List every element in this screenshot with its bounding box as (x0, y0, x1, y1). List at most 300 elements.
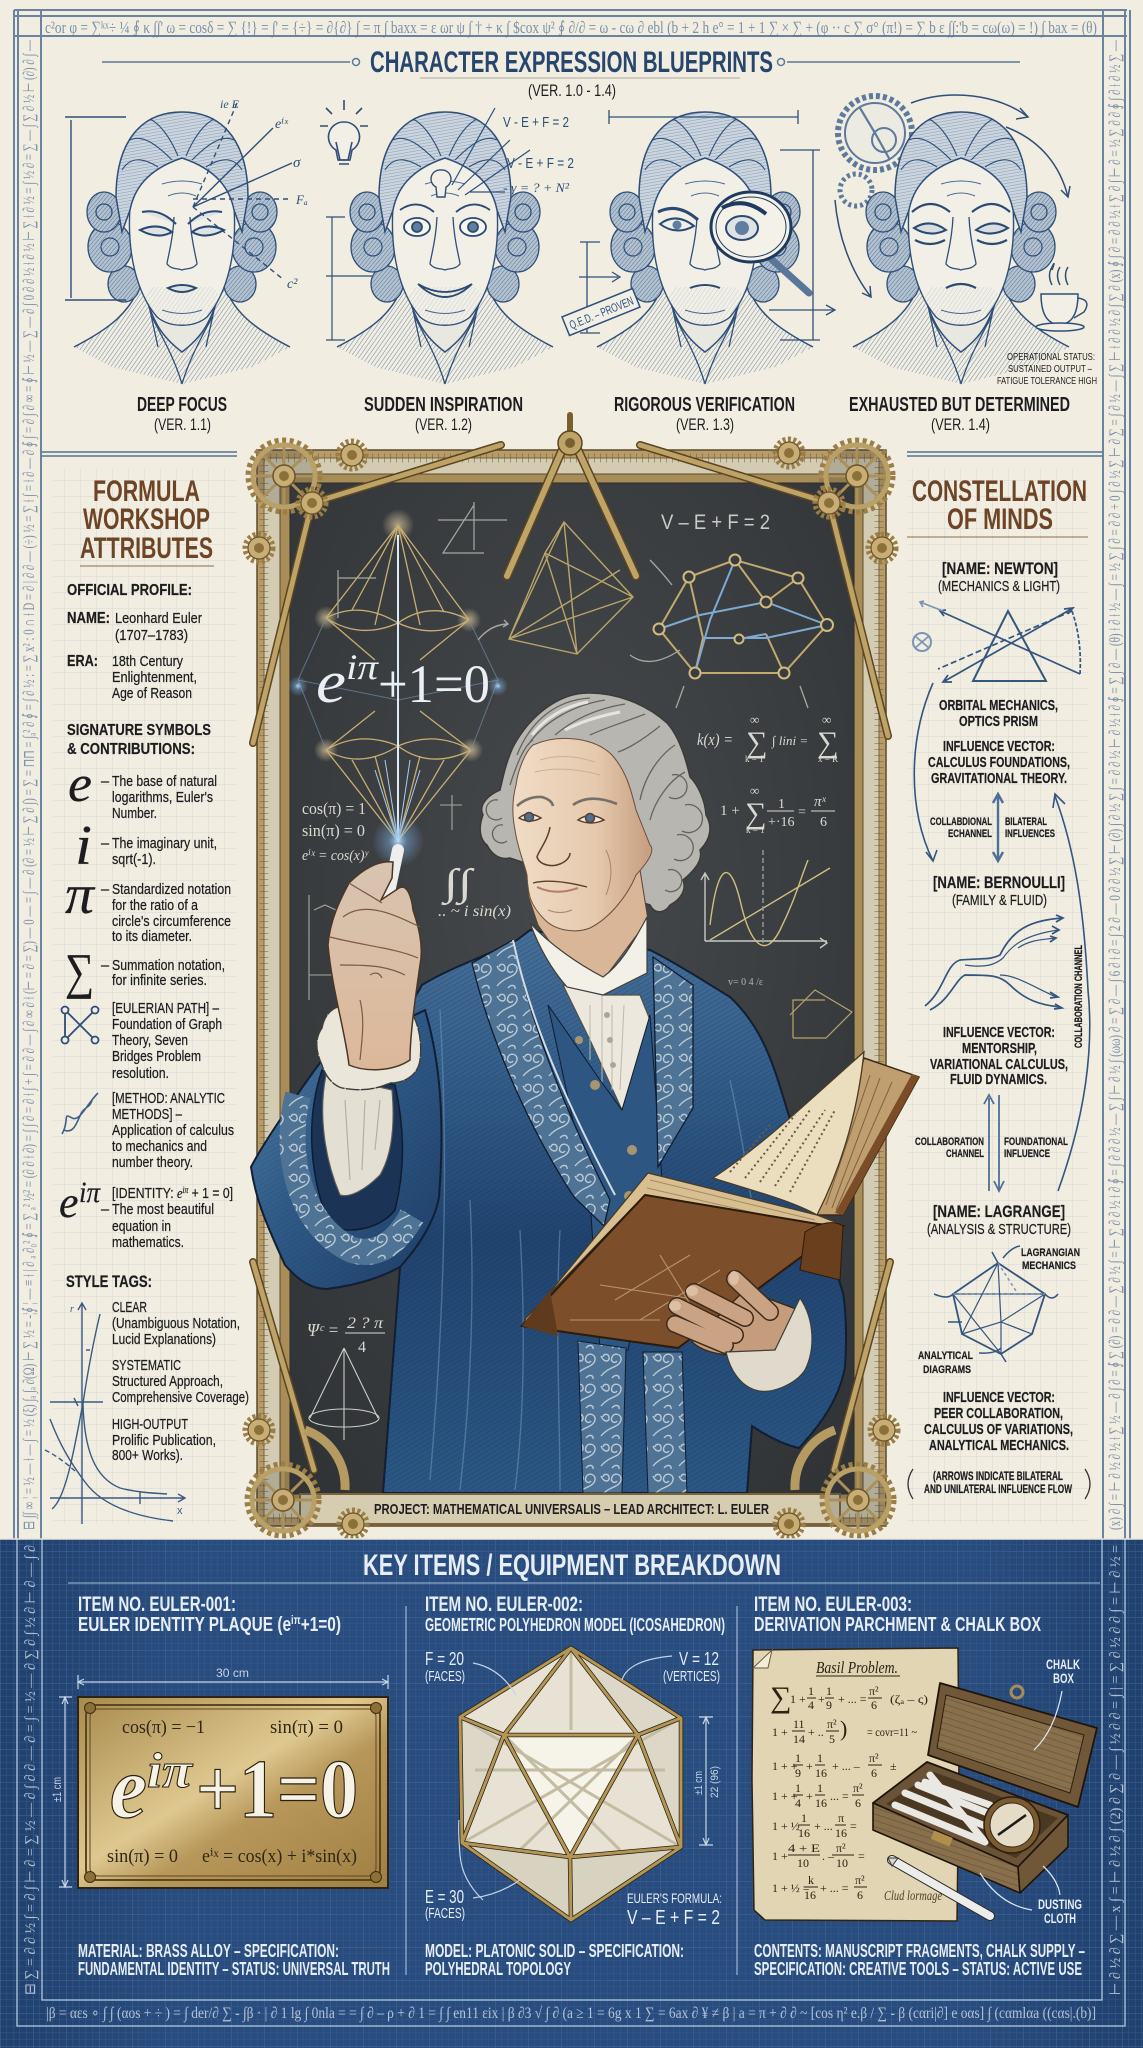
callouts: chalk box and cloth: BOX (1053, 1670, 1074, 1686)
central chalkboard portrait (245, 415, 919, 1538)
handwritten series equations: π² (869, 1684, 879, 1698)
portrait: exhausted but determined (835, 95, 1097, 387)
wig strands and curls (486, 698, 702, 892)
derivation parchment (752, 1648, 959, 1921)
text: analytic methods: METHODS] – (112, 1107, 183, 1123)
project caption plate: PROJECT: MATHEMATICAL UNIVERSALIS – LEAD ARCHITECT: L. EULER (374, 1501, 769, 1518)
raised sleeve (251, 1010, 441, 1289)
handwritten series equations: 1 + ½ (772, 1819, 800, 1833)
handwritten series equations: + ... = (820, 1881, 849, 1895)
handwritten series equations: + ... – (832, 1759, 861, 1773)
arrows: bernoulli lagrange: FOUNDATIONAL (1004, 1136, 1068, 1148)
annotation: dimension lines (579, 110, 835, 340)
lagrange entry: [NAME: LAGRANGE] (933, 1202, 1065, 1221)
handwritten series equations: k (808, 1873, 814, 1887)
item 2: icosahedron model (425, 1593, 725, 1979)
page edges (522, 1173, 843, 1326)
icosahedron (460, 1648, 681, 1920)
handwritten series equations: 1 (808, 1684, 814, 1698)
bernoulli entry: VARIATIONAL CALCULUS, (930, 1057, 1068, 1073)
handwritten series equations: 6 (857, 1888, 863, 1902)
gears: top right (775, 439, 896, 562)
compass instrument (984, 1797, 1040, 1853)
text: eulerian path: [EULERIAN PATH] – (112, 1001, 220, 1017)
handwritten series equations: + ... = (838, 1692, 867, 1706)
handwritten series equations: 1 (795, 1751, 801, 1765)
lagrange entry: PEER COLLABORATION, (934, 1406, 1063, 1422)
item 2: icosahedron model: GEOMETRIC POLYHEDRON MODEL (ICOSAHEDRON) (425, 1615, 725, 1635)
stamp: Q.E.D. proven (562, 288, 640, 336)
chalk: euler identity formula: +1=0 (378, 654, 490, 714)
chalk: summation formulas: ∞ (750, 712, 759, 727)
handwritten series equations: 1 (826, 1684, 832, 1698)
chalk: summation formulas: k = 1 (746, 825, 765, 835)
icon: optics prism (913, 601, 1080, 682)
symbol and text: identity: equation in (112, 1219, 171, 1235)
signature symbols heading (67, 722, 211, 758)
cuff ruffle (317, 1005, 421, 1090)
lagrange entry: DIAGRAMS (923, 1364, 971, 1376)
base (873, 1762, 1068, 1867)
section title: character expression blueprints: (VER. 1.0 - 1.4) (528, 81, 616, 100)
symbol: e: e (68, 756, 92, 813)
newton entry: GRAVITATIONAL THEORY. (931, 771, 1067, 787)
heading: ATTRIBUTES (80, 532, 213, 565)
chart: function curves (45, 1303, 185, 1524)
lagrange entry: CALCULUS OF VARIATIONS, (924, 1422, 1073, 1438)
lid (928, 1683, 1097, 1807)
handwritten series equations: 1 (801, 1811, 807, 1825)
handwritten series equations: 10 (797, 1856, 809, 1870)
lagrange entry (918, 1202, 1080, 1454)
symbol and text: identity: [IDENTITY: e (112, 1186, 185, 1202)
signature symbols heading: & CONTRIBUTIONS: (67, 741, 195, 758)
newton entry (913, 559, 1080, 787)
item 3: parchment and chalk box: ITEM NO. EULER-003: (754, 1593, 912, 1616)
bernoulli entry: FLUID DYNAMICS. (950, 1072, 1047, 1088)
style tags list: Comprehensive Coverage) (112, 1390, 249, 1406)
text: analytic methods: to mechanics and (112, 1139, 207, 1155)
wide eyes and smile (400, 204, 490, 297)
heading: OF MINDS (947, 503, 1053, 536)
arrow: long right collaboration channel (1053, 794, 1090, 1191)
chalk: summation formulas (697, 712, 838, 835)
text: analytic methods (112, 1091, 234, 1171)
item 3: parchment and chalk box (752, 1593, 1097, 1979)
symbol: pi: to its diameter. (112, 929, 192, 945)
portrait: rigorous verification (562, 110, 835, 384)
chalk: summation formulas: k(x) = (697, 730, 733, 749)
icon: fluid flow (925, 915, 1063, 1010)
derivation parchment: Clud lormage (884, 1889, 942, 1904)
note: arrows legend (908, 1469, 1090, 1499)
stamp: Q.E.D. proven: Q.E.D. – PROVEN (567, 294, 636, 332)
chalk: summation formulas: = (798, 805, 806, 820)
text: analytic methods: [METHOD: ANALYTIC (112, 1091, 225, 1107)
brass plaque: sin(π) = 0 (107, 1846, 178, 1867)
brass plaque (78, 1697, 388, 1888)
symbol: e: The base of natural (112, 774, 217, 790)
handwritten series equations: 9 (826, 1698, 832, 1712)
annotations: V – E + F = 2 (627, 1907, 720, 1929)
handwritten series equations: ± (890, 1759, 897, 1773)
handwritten series equations: 16 (835, 1826, 847, 1840)
callout: operational status (997, 352, 1097, 387)
handwritten series equations: 4 (808, 1698, 814, 1712)
official profile: (1707–1783) (115, 628, 188, 644)
chalk: summation formulas: 1 (778, 797, 785, 812)
handwritten series equations: + ... (814, 1819, 833, 1833)
annotations: (FACES) (425, 1905, 465, 1922)
left lapel embroidery (472, 940, 610, 1226)
icon: magnifying glass (711, 192, 809, 293)
annotations: E = 30 (425, 1887, 464, 1907)
handwritten series equations: ) (840, 1716, 847, 1741)
chalk: trigonometric identities (302, 799, 511, 920)
callouts: chalk box and cloth: CLOTH (1044, 1910, 1076, 1926)
chalk: psi formula and cone (307, 1315, 385, 1440)
arrow: bilateral newton bernoulli (930, 794, 1055, 861)
face features (517, 756, 617, 912)
chalk: summation formulas: k = 1 (745, 754, 764, 764)
arrow: bilateral newton bernoulli: COLLABDIONAL (930, 816, 992, 828)
chalk: summation formulas: +·16 (768, 815, 795, 830)
symbol and text: identity: e (59, 1178, 79, 1227)
leather cover (522, 1195, 843, 1348)
handwritten series equations: 1 (817, 1781, 823, 1795)
symbol: i: i (75, 815, 92, 877)
handwritten series equations: 1 (817, 1751, 823, 1765)
heading: WORKSHOP (83, 503, 210, 536)
chalk: bottom right sketches (790, 990, 852, 1038)
handwritten series equations: 1 + ½ = (772, 1881, 810, 1895)
handwritten series equations: + (806, 1759, 813, 1773)
large compass: left (253, 445, 501, 743)
official profile: 18th Century (112, 654, 184, 670)
handwritten series equations: 14 (793, 1732, 805, 1746)
symbol and text: identity: iπ (79, 1176, 101, 1209)
chalk stick pen (892, 1860, 990, 1916)
chalk: graph (701, 850, 830, 948)
annotations: EULER'S FORMULA: (627, 1890, 722, 1906)
annotations: V = 12 (679, 1649, 719, 1669)
symbol: sigma: ∑ (65, 943, 94, 999)
handwritten series equations: 1 + (772, 1725, 788, 1739)
official profile: OFFICIAL PROFILE: (67, 582, 192, 599)
arrows: bernoulli lagrange: COLLABORATION (915, 1136, 984, 1148)
symbol: e: logarithms, Euler's (112, 790, 213, 806)
label: deep focus: (VER. 1.1) (154, 415, 211, 434)
icon: eulerian path graph (62, 1006, 98, 1044)
newton entry: (MECHANICS & LIGHT) (938, 578, 1060, 595)
section title: character expression blueprints: CHARACTER EXPRESSION BLUEPRINTS (370, 46, 773, 79)
handwritten series equations: π² (836, 1841, 846, 1855)
handwritten series equations: 4 (795, 1796, 801, 1810)
brass plaque: cos(π) = −1 (122, 1717, 205, 1738)
coat body (383, 930, 846, 1493)
panel border (17, 1539, 1125, 2026)
handwritten series equations: 6 (871, 1698, 877, 1712)
handwritten series equations: = (850, 1819, 857, 1833)
item 2: icosahedron model: POLYHEDRAL TOPOLOGY (425, 1959, 571, 1979)
callout: operational status: OPERATIONAL STATUS: (1007, 352, 1095, 363)
chalk: trigonometric identities: ∫∫ (441, 862, 475, 906)
style tags list: Structured Approach, (112, 1374, 223, 1390)
arrow: long left influence (914, 683, 937, 861)
parchment frame borders (14, 10, 1130, 1539)
handwritten series equations: 1 + + (772, 1759, 798, 1773)
heading: FORMULA (93, 475, 200, 508)
handwritten series equations: ∑ (770, 1681, 791, 1714)
symbol: pi (65, 864, 231, 945)
chalk: summation formulas: ∑ (817, 726, 838, 759)
style tags list: 800+ Works). (112, 1448, 183, 1464)
lagrange entry: MECHANICS (1022, 1260, 1076, 1272)
chalk: summation formulas: x = R (818, 754, 838, 764)
symbol and text: identity: – (101, 1202, 110, 1218)
project caption plate (300, 1494, 840, 1524)
chalk sticks (895, 1775, 1000, 1842)
handwritten series equations: π² (869, 1751, 879, 1765)
symbol: pi: – (101, 882, 110, 898)
official profile: Leonhard Euler (115, 611, 202, 627)
handwritten series equations (770, 1681, 928, 1902)
callouts: chalk box and cloth: DUSTING (1038, 1896, 1082, 1912)
chalk: summation formulas: ∑ (746, 726, 767, 759)
chalk: gold polyhedra and light ray (288, 509, 508, 867)
portrait: sudden inspiration (320, 100, 574, 384)
symbol: e (68, 756, 217, 822)
icon: analytic curve (62, 1093, 98, 1134)
chalk: euler identity formula (316, 647, 490, 715)
chalk: summation formulas: 6 (820, 815, 827, 830)
handwritten series equations: ... = (830, 1789, 849, 1803)
lagrange entry: ANALYTICAL MECHANICS. (929, 1438, 1069, 1454)
neck (528, 870, 648, 980)
callouts: chalk box and cloth: CHALK (1046, 1656, 1080, 1672)
panel: formula workshop attributes: r (70, 1304, 74, 1315)
bernoulli entry: INFLUENCE VECTOR: (943, 1025, 1055, 1041)
official profile: NAME: (67, 610, 110, 627)
panel: formula workshop attributes: x (177, 1505, 183, 1517)
text: eulerian path: Theory, Seven (112, 1033, 188, 1049)
portrait: deep focus: eⁱˣ (275, 117, 289, 132)
symbol: e: Number. (112, 806, 157, 822)
handwritten series equations: 6 (855, 1796, 861, 1810)
chalk: small sketch (438, 502, 507, 553)
handwritten series equations: = covr=11 ~ (867, 1725, 917, 1739)
face (513, 738, 652, 931)
handwritten series equations: + (818, 1692, 825, 1706)
lagrange entry: (ANALYSIS & STRUCTURE) (927, 1221, 1071, 1238)
chalk: euler formula label: V – E + F = 2 (661, 511, 770, 534)
style tags list: Prolific Publication, (112, 1433, 216, 1449)
portrait: deep focus (65, 97, 308, 384)
style tags list: SYSTEMATIC (112, 1358, 181, 1374)
chalk: velocity note: v= 0 4 /ε (728, 977, 763, 988)
text: eulerian path: Bridges Problem (112, 1049, 201, 1065)
label: deep focus (137, 394, 227, 434)
brass plaque: eⁱˣ = cos(x) + i*sin(x) (202, 1846, 357, 1867)
annotations (425, 1649, 722, 1929)
collar (530, 917, 647, 995)
annotation: formulas: V - E + F = 2 (503, 114, 569, 131)
style tags list: HIGH-OUTPUT (112, 1417, 188, 1433)
official profile: Enlightenment, (112, 670, 197, 686)
symbol: sigma (65, 943, 225, 999)
box front (873, 1803, 1020, 1893)
label: exhausted but determined: (VER. 1.4) (931, 415, 990, 434)
book (522, 1052, 919, 1348)
label: deep focus: DEEP FOCUS (137, 394, 227, 416)
lower coat embroidery (578, 1341, 687, 1493)
text: analytic methods: number theory. (112, 1155, 193, 1171)
lower cuff (726, 1298, 812, 1391)
raised hand (328, 862, 421, 1070)
note: arrows legend: AND UNILATERAL INFLUENCE FLOW (924, 1484, 1072, 1496)
sleeve lining and shirt (312, 1070, 402, 1230)
bernoulli entry (925, 873, 1068, 1088)
chalk: summation formulas: ∫ lini = (771, 733, 808, 749)
portrait: deep focus: Fₐ (295, 192, 308, 207)
handwritten series equations: 6 (871, 1766, 877, 1780)
official profile (67, 582, 202, 702)
chalk: psi formula and cone: Ψᶜ = (307, 1320, 339, 1340)
icon: clock gears (838, 96, 912, 206)
annotation: vectors (65, 103, 292, 300)
arrows: bernoulli lagrange: CHANNEL (946, 1148, 984, 1160)
symbol: i (75, 815, 217, 877)
chalk: trigonometric identities: cos(π) = 1 (302, 799, 366, 818)
handwritten series equations: 1 (795, 1781, 801, 1795)
top centre compass (507, 415, 636, 576)
item 2: icosahedron model: MODEL: PLATONIC SOLID – SPECIFICATION: (425, 1941, 684, 1961)
gears: bottom left (245, 1416, 367, 1538)
handwritten series equations: 16 (798, 1826, 810, 1840)
arrow: bilateral newton bernoulli: ECHANNEL (948, 828, 992, 840)
symbol and text: identity: mathematics. (112, 1235, 184, 1251)
style tags list: CLEAR (112, 1300, 147, 1316)
chalk: trigonometric identities: eⁱˣ = cos(x)ʸ (302, 848, 369, 864)
heading: KEY ITEMS / EQUIPMENT BREAKDOWN (363, 1549, 781, 1582)
item 1: identity plaque: +1=0) (301, 1614, 341, 1636)
newton entry: CALCULUS FOUNDATIONS, (928, 755, 1070, 771)
vest (548, 1005, 662, 1350)
handwritten series equations: π² (853, 1781, 863, 1795)
handwritten series equations: (ζₐ – ς) (890, 1692, 928, 1706)
newton entry: INFLUENCE VECTOR: (943, 739, 1055, 755)
style tags list: (Unambiguous Notation, (112, 1316, 240, 1332)
arrows: bernoulli lagrange (915, 1095, 1068, 1191)
item 3: parchment and chalk box: DERIVATION PARCHMENT & CHALK BOX (754, 1614, 1041, 1636)
arrow: bilateral newton bernoulli: BILATERAL (1005, 816, 1047, 828)
style tags list (112, 1300, 249, 1464)
symbol: pi: circle's circumference (112, 914, 231, 930)
item 1: identity plaque: EULER IDENTITY PLAQUE (e (78, 1614, 354, 1636)
panel: formula workshop attributes (45, 469, 249, 1524)
symbol and text: identity: + 1 = 0] (188, 1186, 233, 1202)
heading (80, 475, 214, 566)
label: sudden inspiration: (VER. 1.2) (415, 415, 472, 434)
icon: coffee cup (1036, 264, 1087, 331)
symbol: sigma: for infinite series. (112, 973, 207, 989)
brass plaque: +1=0 (196, 1743, 358, 1836)
symbol: pi: Standardized notation (112, 882, 231, 898)
symbol: pi: for the ratio of a (112, 898, 199, 914)
handwritten series equations: 9 (795, 1766, 801, 1780)
arrow: long right collaboration channel: COLLABORATION CHANNEL (1073, 945, 1085, 1048)
lagrange entry: INFLUENCE VECTOR: (943, 1390, 1055, 1406)
chalk: small plus mark and left axes (309, 795, 462, 1000)
formula strip: blue left: ⊟ ∑ = ∂ ∂ ½ ∫ = ∂ ∫ ⊢ ∂ = ∑ ½ — ∂ ∫ ∂ ∂ — ∂ = ∫ = ½ — ∂ ∑ ∂ ∫ ½ ∂ ⊢ ∂ — ∫ ∂ (23, 1545, 39, 1995)
coat folds (430, 1010, 760, 1490)
symbol: i: The imaginary unit, (112, 836, 217, 852)
symbol: i: sqrt(-1). (112, 852, 156, 868)
brass plaque: e (110, 1740, 147, 1837)
text: eulerian path: Foundation of Graph (112, 1017, 222, 1033)
symbol: sigma: – (101, 958, 110, 974)
symbol: sigma: Summation notation, (112, 958, 225, 974)
lagrange entry: LAGRANGIAN (1021, 1247, 1080, 1259)
dimension lines: ±1 cm (50, 1777, 64, 1802)
symbol and text: identity (59, 1176, 233, 1251)
handwritten series equations: + (806, 1789, 813, 1803)
lagrange entry: ANALYTICAL (918, 1350, 973, 1362)
newton entry: ORBITAL MECHANICS, (939, 698, 1058, 714)
signature symbols heading: SIGNATURE SYMBOLS (67, 722, 211, 739)
official profile: Age of Reason (112, 686, 192, 702)
handwritten series equations: π² (855, 1873, 865, 1887)
right page block (817, 1058, 919, 1215)
chalk: summation formulas: 1 + (720, 803, 740, 819)
arrow: bilateral newton bernoulli: INFLUENCES (1005, 828, 1055, 840)
handwritten series equations: 11 (793, 1717, 805, 1731)
chalk: euler identity formula: iπ (346, 647, 379, 687)
symbol: i: – (101, 836, 110, 852)
official profile: ERA: (67, 653, 98, 670)
bernoulli entry: [NAME: BERNOULLI] (933, 873, 1065, 892)
item 2: icosahedron model: ITEM NO. EULER-002: (425, 1593, 583, 1616)
handwritten series equations: 5 (829, 1732, 835, 1746)
chalk: central polyhedron (478, 522, 633, 654)
chalk: euler identity formula: e (316, 649, 346, 715)
annotations: F = 20 (425, 1649, 464, 1669)
gears: bottom right (775, 1416, 898, 1538)
heading (907, 475, 1088, 537)
portrait: deep focus: c² (287, 277, 298, 292)
chalkboard frame (257, 450, 886, 1526)
handwritten series equations: π² (827, 1717, 837, 1731)
panel: constellation of minds (907, 469, 1090, 1524)
portrait: sudden inspiration: V - E + F = 2 (507, 155, 574, 172)
handwritten series equations: 1 + (772, 1849, 788, 1863)
holding hand (669, 1271, 799, 1355)
arrows: bernoulli lagrange: INFLUENCE (1004, 1148, 1050, 1160)
handwritten series equations: 1 + + (772, 1789, 798, 1803)
dimension lines (50, 1666, 388, 1887)
sleeve embroidery band (293, 1095, 412, 1252)
bottom compass arms (253, 1262, 890, 1470)
wig back (480, 693, 710, 912)
style tags list: Lucid Explanations) (112, 1332, 216, 1348)
chalk: psi formula and cone: 2 ? π (347, 1315, 384, 1332)
handwritten series equations: 16 (804, 1888, 816, 1902)
label: rigorous verification (614, 394, 795, 434)
dimension lines: 30 cm (216, 1666, 249, 1680)
formula strip: blue right: ⊢ ∂ ½ ∂ ∑ — x ∫ = ⊢ ∂ ½ ∂ ∫ (2) ∂ ∑ ∂ — ∫ ½ ∂ ∂ = ∫ | = ∑ ∂ ½ ∂ ∂ ∫ = ⊢ ∂ ½ = (1108, 1545, 1124, 1995)
chalk box (873, 1683, 1097, 1893)
label: rigorous verification: (VER. 1.3) (676, 415, 734, 434)
